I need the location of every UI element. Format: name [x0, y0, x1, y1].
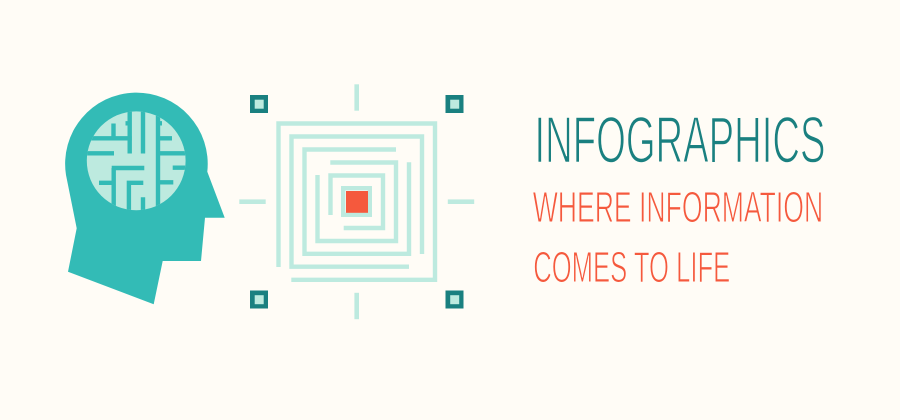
corner marker bottom left — [250, 290, 268, 308]
center square frame — [343, 188, 370, 215]
icon: concentric maze target — [278, 124, 435, 280]
brain circle — [87, 111, 186, 210]
maze spiral 3 — [304, 150, 409, 254]
crosshair ticks — [239, 84, 474, 319]
maze spiral 2 — [292, 136, 422, 267]
corner marker top right — [446, 95, 464, 113]
maze spiral 4 — [318, 162, 396, 241]
brain circuit lines — [87, 112, 186, 210]
corner marker bottom right — [446, 290, 464, 308]
infographic canvas — [65, 84, 824, 320]
head profile — [65, 93, 225, 304]
center red square — [346, 191, 368, 213]
maze spiral 1 — [278, 124, 435, 280]
corner marker top left — [250, 95, 268, 113]
maze spiral 5 — [330, 176, 383, 228]
icon: head silhouette with circuit brain — [65, 93, 225, 304]
subtitle line 2: COMES TO LIFE — [533, 243, 730, 292]
